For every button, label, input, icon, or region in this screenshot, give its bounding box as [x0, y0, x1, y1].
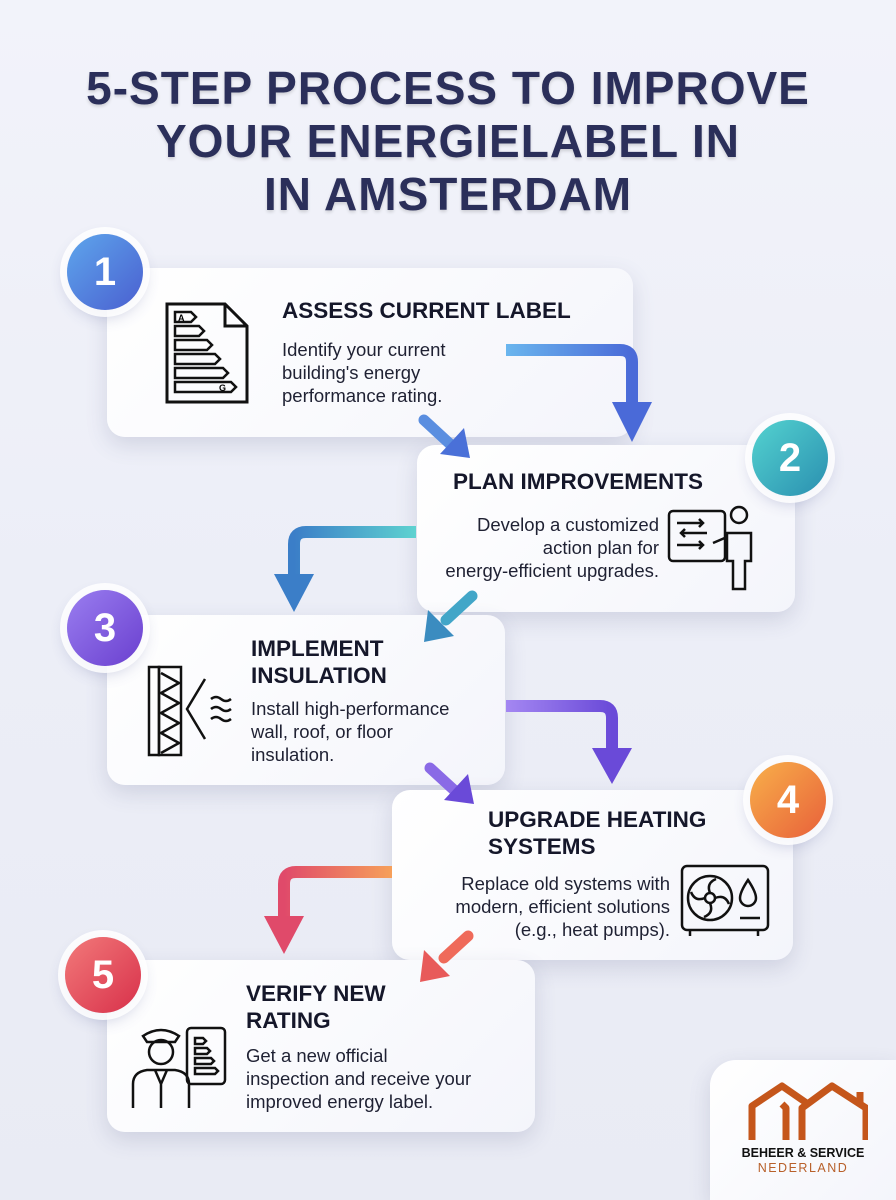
badge 1: 1 [94, 250, 116, 294]
text: Get a new official [246, 1045, 388, 1066]
panel: step 2 [417, 445, 795, 612]
panel: step 3 [107, 615, 505, 785]
icon: planner [668, 506, 752, 590]
icon: houses logo [748, 1082, 868, 1140]
text [445, 514, 659, 581]
badge 3: 3 [94, 606, 116, 650]
badge 2 [752, 420, 828, 496]
icon: energy label document: A [178, 313, 185, 323]
badge 5: 5 [92, 953, 114, 997]
icon: heat pump [680, 864, 770, 936]
text [251, 698, 449, 765]
icon: insulation [148, 666, 232, 756]
heading: VERIFY NEW [246, 981, 386, 1006]
title: 5-STEP PROCESS TO IMPROVE [86, 62, 810, 114]
text: Install high-performance [251, 698, 449, 719]
text: Identify your current [282, 339, 446, 360]
text: performance rating. [282, 385, 442, 406]
title [86, 62, 810, 220]
text: improved energy label. [246, 1091, 433, 1112]
arrow 3 to 4 [430, 706, 632, 804]
text: action plan for [543, 537, 659, 558]
badge 5 [65, 937, 141, 1013]
arrow 1 to 2 [424, 350, 652, 458]
badge 4 [750, 762, 826, 838]
heading [246, 981, 386, 1033]
text [455, 873, 670, 940]
heading [488, 807, 706, 859]
heading: PLAN IMPROVEMENTS [453, 469, 703, 494]
arrow 4 to 5 [264, 872, 468, 982]
icon: inspector with tablet [132, 1026, 226, 1108]
icon: energy label document [166, 302, 248, 404]
heading [251, 636, 387, 688]
badge 3 [67, 590, 143, 666]
heading: UPGRADE HEATING [488, 807, 706, 832]
text: building's energy [282, 362, 420, 383]
title: IN AMSTERDAM [264, 168, 632, 220]
text: modern, efficient solutions [455, 896, 670, 917]
heading: IMPLEMENT [251, 636, 384, 661]
text [246, 1045, 471, 1112]
badge 1 [67, 234, 143, 310]
text: insulation. [251, 744, 334, 765]
badge 4: 4 [777, 778, 799, 822]
icon: energy label document: G [219, 383, 226, 393]
text: inspection and receive your [246, 1068, 471, 1089]
heading: ASSESS CURRENT LABEL [282, 298, 571, 323]
arrow 2 to 3 [274, 532, 472, 642]
heading: RATING [246, 1008, 331, 1033]
text: energy-efficient upgrades. [445, 560, 659, 581]
heading: SYSTEMS [488, 834, 596, 859]
text: (e.g., heat pumps). [515, 919, 670, 940]
text: Replace old systems with [461, 873, 670, 894]
brand text: NEDERLAND [758, 1161, 848, 1175]
text: Develop a customized [477, 514, 659, 535]
text [282, 339, 446, 406]
text: wall, roof, or floor [251, 721, 393, 742]
panel: step 1 [107, 268, 633, 437]
heading: INSULATION [251, 663, 387, 688]
logo card [710, 1060, 896, 1200]
brand text: BEHEER & SERVICE [742, 1146, 864, 1160]
panel: step 4 [392, 790, 793, 960]
badge 2: 2 [779, 436, 801, 480]
brand text [742, 1146, 864, 1175]
panel: step 5 [107, 960, 535, 1132]
title: YOUR ENERGIELABEL IN [156, 115, 740, 167]
